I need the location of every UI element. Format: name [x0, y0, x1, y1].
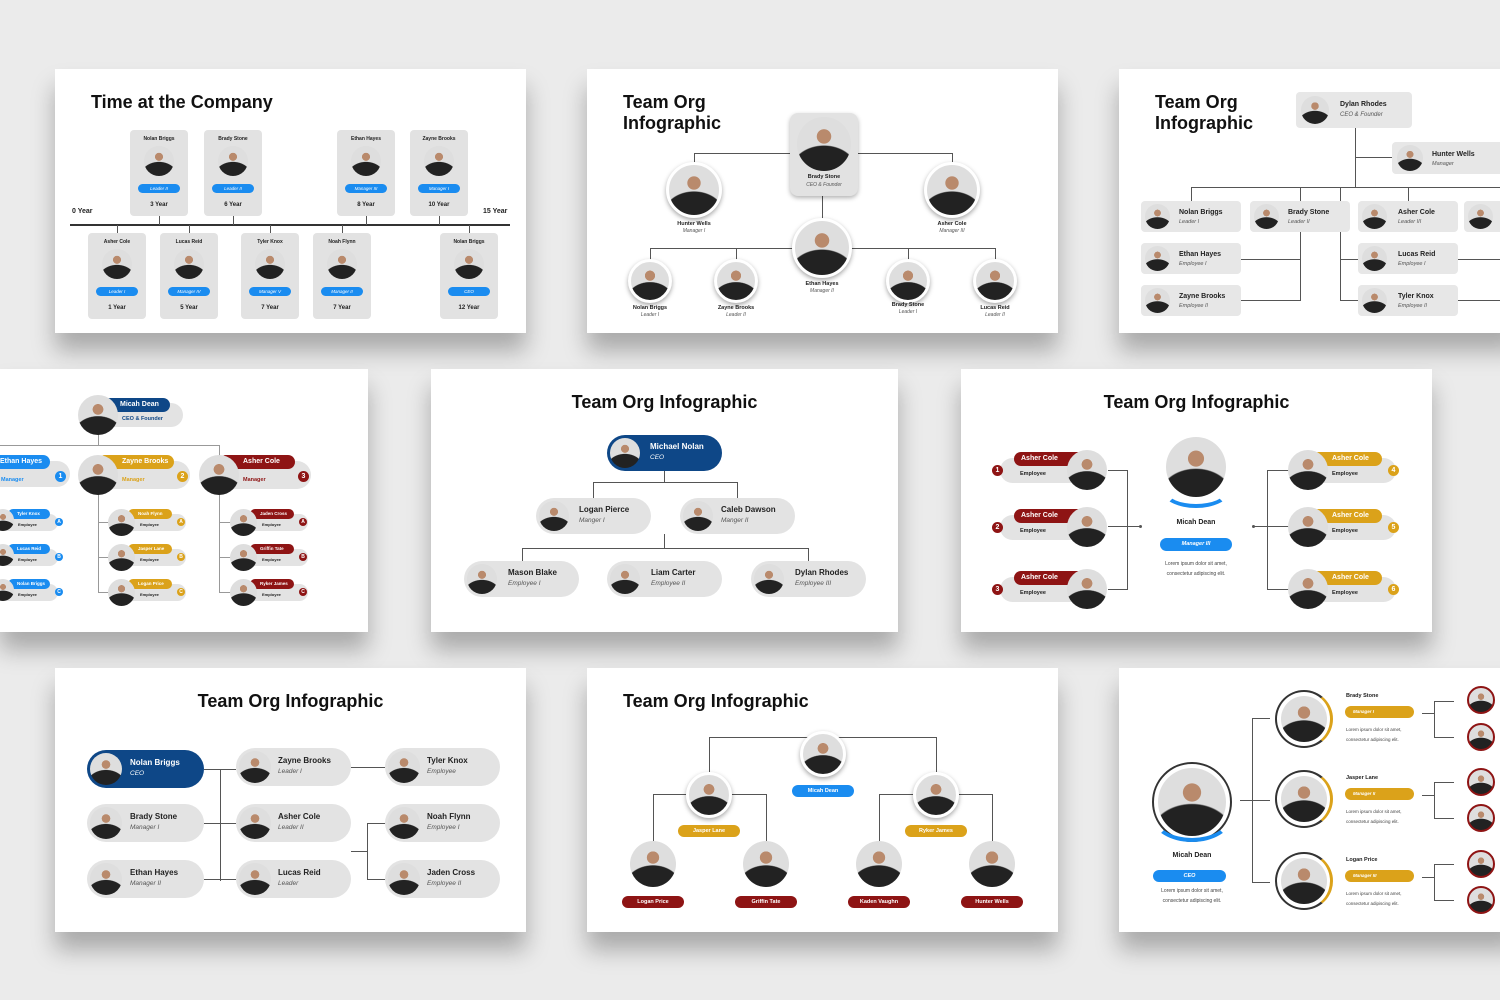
card: Brady Stone: [204, 130, 262, 216]
manager: Zayne Brooks: 2: [181, 473, 184, 480]
manager: Jasper Lane: Lorem ipsum dolor sit amet,: [1346, 809, 1402, 814]
pill: Ethan Hayes: Manager II: [130, 880, 161, 887]
slide 6: central manager with two sides: [961, 369, 1432, 632]
slide 1: time at the company: [55, 69, 526, 333]
pill: Lucas Reid: Lucas Reid: [278, 868, 321, 877]
box: Hunter Wells: Manager: [1432, 161, 1454, 167]
node: Ethan Hayes: [789, 217, 855, 294]
left item 3: Asher Cole: [1021, 574, 1058, 581]
node: Lucas Reid: Leader II: [985, 312, 1005, 318]
title: Infographic: [623, 113, 721, 133]
card: Noah Flynn: [313, 233, 371, 319]
box: Nolan Briggs: [1141, 201, 1241, 232]
box: Zayne Brooks: [1141, 285, 1241, 316]
node: Lucas Reid: Lucas Reid: [980, 305, 1010, 311]
right item 6: [1288, 569, 1399, 609]
box: Tyler Knox: [1358, 285, 1458, 316]
box: Dylan Rhodes: Dylan Rhodes: [1340, 101, 1387, 108]
left item 2: Asher Cole: [1021, 512, 1058, 519]
pill: Asher Cole: Leader II: [278, 824, 304, 831]
box: cut off: [1464, 201, 1500, 232]
left item 1: 1: [996, 467, 999, 474]
card: Nolan Briggs CEO: Nolan Briggs: [453, 239, 485, 245]
node: Ryker James: Ryker James: [919, 828, 953, 834]
manager: Logan Price: [1275, 852, 1414, 910]
card: Nolan Briggs: Nolan Briggs: [143, 136, 175, 142]
right item 5: Asher Cole: [1332, 512, 1369, 519]
node: Micah Dean: [792, 730, 854, 797]
node: Hunter Wells: Hunter Wells: [975, 899, 1009, 905]
manager: Zayne Brooks: Zayne Brooks: [122, 458, 168, 465]
right item 4: 4: [1392, 467, 1395, 474]
ceo: Micah Dean: Lorem ipsum dolor sit amet,: [1161, 888, 1223, 894]
node: Hunter Wells: Hunter Wells: [677, 221, 711, 227]
box: Nolan Briggs: Leader I: [1179, 219, 1199, 225]
pill: Ethan Hayes: Ethan Hayes: [130, 868, 178, 877]
right item 5: Employee: [1332, 528, 1358, 534]
node: Lucas Reid: [970, 258, 1020, 318]
right item 5: [1288, 507, 1399, 547]
manager: Zayne Brooks: Manager: [122, 477, 145, 483]
node: Ethan Hayes: Manager II: [810, 288, 834, 294]
employees: gold column: Employee: [140, 522, 159, 527]
node: Logan Price: Logan Price: [637, 899, 669, 905]
employees: red column: A: [301, 519, 305, 525]
card: Lucas Reid: [160, 233, 218, 319]
head: Micah Dean: CEO & Founder: [122, 416, 163, 422]
left item 2: 2: [996, 524, 999, 531]
node: Brady Stone: Brady Stone: [892, 302, 924, 308]
left item 1: Asher Cole: [1021, 455, 1058, 462]
employees: gold column: Employee: [140, 592, 159, 597]
small avatars: [1467, 686, 1495, 914]
card: Noah Flynn: 7 Year: [333, 305, 351, 311]
box: Dylan Rhodes: CEO & Founder: [1340, 112, 1383, 118]
card: Lucas Reid: Manager IV: [177, 289, 201, 294]
box: Brady Stone: Leader II: [1288, 219, 1310, 225]
head: Micah Dean: Micah Dean: [120, 401, 159, 408]
pill: Noah Flynn: Employee I: [427, 824, 460, 831]
top card: Brady Stone CEO: [790, 113, 858, 196]
pill: Dylan Rhodes: Dylan Rhodes: [795, 568, 848, 577]
pill: Lucas Reid: [236, 860, 351, 898]
pill: Zayne Brooks: Zayne Brooks: [278, 756, 331, 765]
node: Ethan Hayes: Ethan Hayes: [805, 281, 838, 287]
card: Lucas Reid: 5 Year: [180, 305, 198, 311]
pill: Mason Blake: Mason Blake: [508, 568, 557, 577]
card: Lucas Reid: Lucas Reid: [176, 239, 202, 245]
card: Noah Flynn: Manager II: [331, 289, 353, 294]
employees: blue column: C: [57, 589, 61, 595]
employees: gold column: Jasper Lane: [138, 546, 164, 551]
manager: Asher Cole: [199, 455, 311, 495]
node: Logan Price: [622, 841, 684, 908]
pill: Logan Pierce: [536, 498, 651, 534]
manager: Logan Price: Logan Price: [1346, 857, 1377, 863]
box: Asher Cole: Leader III: [1398, 219, 1421, 225]
node: Asher Cole: [921, 161, 983, 234]
node: Hunter Wells: Manager I: [683, 228, 705, 234]
employees: blue column: Employee: [18, 592, 37, 597]
node: Nolan Briggs: Nolan Briggs: [633, 305, 667, 311]
pill: Asher Cole: Asher Cole: [278, 812, 320, 821]
title: Infographic: [1155, 113, 1253, 133]
ceo: Micah Dean: CEO: [1184, 873, 1195, 879]
pill: Noah Flynn: Noah Flynn: [427, 812, 471, 821]
slide 5: pill tree: [431, 369, 898, 632]
employees: red column: Jaden Cross: [260, 511, 287, 516]
pill: Michael Nolan CEO: Michael Nolan: [650, 442, 704, 451]
center: Micah Dean: Manager III: [1182, 541, 1210, 547]
pill: Mason Blake: Employee I: [508, 580, 541, 587]
manager: Logan Price: consectetur adipiscing elit.: [1346, 901, 1399, 906]
card: Brady Stone: Leader II: [224, 186, 242, 191]
slide 2: team org tree: [587, 69, 1058, 333]
center: Micah Dean: [1160, 437, 1232, 577]
pill: Asher Cole: [236, 804, 351, 842]
card: Nolan Briggs: 3 Year: [150, 202, 168, 208]
employees: red column: Employee: [262, 557, 281, 562]
manager: Ethan Hayes: Manager: [1, 477, 24, 483]
label: 0 year: 0 Year: [72, 208, 93, 215]
pill: Noah Flynn: [385, 804, 500, 842]
employees: blue column: Lucas Reid: [17, 546, 41, 551]
box: Brady Stone: Brady Stone: [1288, 209, 1329, 216]
employees: red column: Ryker James: [260, 581, 288, 586]
pill: Liam Carter: Employee II: [651, 580, 685, 587]
card: Tyler Knox: Tyler Knox: [257, 239, 283, 245]
pill: Dylan Rhodes: Employee III: [795, 580, 831, 587]
slide 3: list org chart: [1119, 69, 1500, 333]
title: Team Org Infographic: [198, 691, 383, 711]
slide 9: CEO with three managers: [1119, 668, 1500, 932]
right item 6: 6: [1392, 586, 1395, 593]
box: Tyler Knox: Employee II: [1398, 303, 1427, 309]
box: Ethan Hayes: [1141, 243, 1241, 274]
manager: Logan Price: Manager III: [1353, 873, 1377, 878]
top card: Brady Stone CEO: CEO & Founder: [806, 182, 842, 188]
manager: Ethan Hayes: 1: [59, 473, 62, 480]
node: Hunter Wells: [663, 161, 725, 234]
employees: gold column: C: [179, 589, 183, 595]
employees: gold column: Noah Flynn: [138, 511, 162, 516]
box: Hunter Wells: Hunter Wells: [1432, 151, 1475, 158]
employees: blue column: B: [57, 554, 61, 560]
manager: Brady Stone: [1275, 690, 1414, 748]
box: Lucas Reid: Employee I: [1398, 261, 1426, 267]
pill: Liam Carter: [607, 561, 722, 597]
card: Asher Cole: Asher Cole: [104, 239, 130, 245]
pill: Lucas Reid: Leader: [278, 880, 298, 887]
card: Tyler Knox: 7 Year: [261, 305, 279, 311]
employees: blue column: Nolan Briggs: [17, 581, 45, 586]
manager: Asher Cole: Asher Cole: [243, 458, 280, 465]
title: Team Org Infographic: [1104, 392, 1289, 412]
left item 3: Employee: [1020, 590, 1046, 596]
node: Kaden Vaughn: [848, 841, 910, 908]
center: Micah Dean: Micah Dean: [1177, 519, 1215, 526]
box: Lucas Reid: [1358, 243, 1458, 274]
node: Jasper Lane: Jasper Lane: [693, 828, 725, 834]
box: Zayne Brooks: Zayne Brooks: [1179, 293, 1225, 300]
card: Nolan Briggs CEO: CEO: [464, 289, 474, 294]
card: Brady Stone: 6 Year: [224, 202, 242, 208]
title: [1155, 92, 1253, 133]
box: Hunter Wells: [1392, 142, 1500, 174]
node: Griffin Tate: Griffin Tate: [752, 899, 780, 905]
node: Griffin Tate: [735, 841, 797, 908]
pill: Tyler Knox: Tyler Knox: [427, 756, 468, 765]
right item 4: Employee: [1332, 471, 1358, 477]
manager: Asher Cole: Manager: [243, 477, 266, 483]
node: Brady Stone: [883, 258, 933, 315]
pill: Logan Pierce: Logan Pierce: [579, 505, 629, 514]
pill: Michael Nolan CEO: CEO: [650, 454, 664, 461]
card: Zayne Brooks: Manager I: [429, 186, 449, 191]
box: Asher Cole: Asher Cole: [1398, 209, 1435, 216]
manager: Jasper Lane: consectetur adipiscing elit.: [1346, 819, 1399, 824]
left item 2: [992, 507, 1107, 547]
card: Ethan Hayes: Manager III: [355, 186, 377, 191]
pill: Zayne Brooks: [236, 748, 351, 786]
pill: Caleb Dawson: [680, 498, 795, 534]
pill: Caleb Dawson: Manger II: [721, 517, 748, 524]
ceo: Micah Dean: [1152, 762, 1232, 904]
right item 4: [1288, 450, 1399, 490]
center: Micah Dean: consectetur adipiscing elit.: [1167, 571, 1225, 577]
employees: gold column: B: [179, 554, 183, 560]
employees: red column: Griffin Tate: [260, 546, 284, 551]
manager: Jasper Lane: Jasper Lane: [1346, 775, 1378, 781]
node: Jasper Lane: [678, 771, 740, 837]
employees: red column: C: [301, 589, 305, 595]
employees: blue column: [0, 509, 63, 601]
employees: blue column: A: [57, 519, 61, 525]
employees: blue column: Tyler Knox: [17, 511, 40, 516]
slide 4: colored team columns: [0, 369, 368, 632]
manager: Ethan Hayes: [0, 455, 70, 487]
box: Asher Cole: [1358, 201, 1458, 232]
box: Zayne Brooks: Employee II: [1179, 303, 1208, 309]
title: Time at the Company: [91, 92, 273, 112]
slide 7: three-column pill org: [55, 668, 526, 932]
card: Tyler Knox: [241, 233, 299, 319]
card: Nolan Briggs CEO: [440, 233, 498, 319]
pill: Brady Stone: Brady Stone: [130, 812, 177, 821]
node: Zayne Brooks: [711, 258, 761, 318]
timeline axis: [70, 224, 510, 226]
card: Zayne Brooks: 10 Year: [429, 202, 449, 208]
ceo: Micah Dean: consectetur adipiscing elit.: [1163, 898, 1221, 904]
card: Ethan Hayes: 8 Year: [357, 202, 375, 208]
manager: Ethan Hayes: Ethan Hayes: [0, 458, 42, 465]
pill: Nolan Briggs CEO: CEO: [130, 770, 144, 777]
card: Zayne Brooks: [410, 130, 468, 216]
node: Nolan Briggs: [625, 258, 675, 318]
card: Tyler Knox: Manager V: [259, 289, 281, 294]
left item 3: [992, 569, 1107, 609]
node: Micah Dean: Micah Dean: [808, 788, 838, 794]
head: Micah Dean: [78, 395, 183, 435]
manager: Logan Price: Lorem ipsum dolor sit amet,: [1346, 891, 1402, 896]
card: Noah Flynn: Noah Flynn: [328, 239, 356, 245]
employees: red column: Employee: [262, 522, 281, 527]
manager: Brady Stone: Lorem ipsum dolor sit amet,: [1346, 727, 1402, 732]
title: Team Org Infographic: [623, 691, 809, 711]
right item 6: Asher Cole: [1332, 574, 1369, 581]
node: Asher Cole: Asher Cole: [937, 221, 967, 227]
node: Kaden Vaughn: Kaden Vaughn: [860, 899, 898, 905]
card: Ethan Hayes: Ethan Hayes: [351, 136, 381, 142]
box: Tyler Knox: Tyler Knox: [1398, 293, 1434, 300]
box: Ethan Hayes: Employee I: [1179, 261, 1207, 267]
manager: Jasper Lane: Manager II: [1353, 791, 1375, 796]
employees: blue column: Employee: [18, 557, 37, 562]
box: Brady Stone: [1250, 201, 1350, 232]
pill: Caleb Dawson: Caleb Dawson: [721, 505, 776, 514]
employees: gold column: Logan Price: [138, 581, 164, 586]
pill: Brady Stone: [87, 804, 204, 842]
employees: red column: B: [301, 554, 305, 560]
employees: gold column: Employee: [140, 557, 159, 562]
pill: Liam Carter: Liam Carter: [651, 568, 695, 577]
right item 4: Asher Cole: [1332, 455, 1369, 462]
pill: Zayne Brooks: Leader I: [278, 768, 302, 775]
node: Zayne Brooks: Leader II: [726, 312, 746, 318]
left item 2: Employee: [1020, 528, 1046, 534]
node: Nolan Briggs: Leader I: [641, 312, 659, 318]
card: Brady Stone: Brady Stone: [218, 136, 248, 142]
node: Ryker James: [905, 771, 967, 837]
manager: Brady Stone: Manager I: [1353, 709, 1374, 714]
card: Nolan Briggs: [130, 130, 188, 216]
node: Zayne Brooks: Zayne Brooks: [718, 305, 754, 311]
pill: Dylan Rhodes: [751, 561, 866, 597]
manager: Brady Stone: Brady Stone: [1346, 693, 1378, 699]
card: Nolan Briggs: Leader II: [150, 186, 168, 191]
box: Dylan Rhodes: [1296, 92, 1412, 128]
card: Asher Cole: [88, 233, 146, 319]
left item 1: Employee: [1020, 471, 1046, 477]
pill: Jaden Cross: [385, 860, 500, 898]
pill: Brady Stone: Manager I: [130, 824, 159, 831]
manager: Brady Stone: consectetur adipiscing elit.: [1346, 737, 1399, 742]
pill: Mason Blake: [464, 561, 579, 597]
node: Brady Stone: Leader I: [899, 309, 917, 315]
box: Lucas Reid: Lucas Reid: [1398, 251, 1435, 258]
node: Hunter Wells: [961, 841, 1023, 908]
title: Team Org Infographic: [572, 392, 757, 412]
slide 8: photo tree with labels: [587, 668, 1058, 932]
pill: Ethan Hayes: [87, 860, 204, 898]
card: Zayne Brooks: Zayne Brooks: [422, 136, 456, 142]
card: Asher Cole: 1 Year: [108, 305, 126, 311]
pill: Jaden Cross: Employee II: [427, 880, 461, 887]
employees: blue column: Employee: [18, 522, 37, 527]
node: Asher Cole: Manager III: [939, 228, 965, 234]
title: Team Org: [1155, 92, 1238, 112]
manager: Jasper Lane: [1275, 770, 1414, 828]
manager: Asher Cole: 3: [302, 473, 305, 480]
ceo: Micah Dean: Micah Dean: [1173, 852, 1211, 859]
employees: red column: Employee: [262, 592, 281, 597]
pill: Tyler Knox: Employee: [427, 768, 456, 775]
pill: Jaden Cross: Jaden Cross: [427, 868, 475, 877]
left item 3: 3: [996, 586, 999, 593]
right item 5: 5: [1392, 524, 1395, 531]
center: Micah Dean: Lorem ipsum dolor sit amet,: [1165, 561, 1227, 567]
title: [623, 92, 721, 133]
box: Nolan Briggs: Nolan Briggs: [1179, 209, 1223, 216]
employees: gold column: A: [179, 519, 183, 525]
pill: Nolan Briggs CEO: [87, 750, 204, 788]
pill: Tyler Knox: [385, 748, 500, 786]
pill: Logan Pierce: Manger I: [579, 517, 605, 524]
manager: Zayne Brooks: [78, 455, 190, 495]
card: Asher Cole: Leader I: [109, 289, 125, 294]
box: Ethan Hayes: Ethan Hayes: [1179, 251, 1221, 258]
right item 6: Employee: [1332, 590, 1358, 596]
employees: red column: [230, 509, 308, 606]
left item 1: [992, 450, 1107, 490]
card: Ethan Hayes: [337, 130, 395, 216]
pill: Nolan Briggs CEO: Nolan Briggs: [130, 758, 180, 767]
label: 15 year: 15 Year: [483, 208, 507, 215]
title: Team Org: [623, 92, 706, 112]
top card: Brady Stone CEO: Brady Stone: [808, 174, 840, 180]
card: Nolan Briggs CEO: 12 Year: [459, 305, 479, 311]
pill: Michael Nolan CEO: [607, 435, 722, 471]
employees: gold column: [108, 509, 186, 606]
